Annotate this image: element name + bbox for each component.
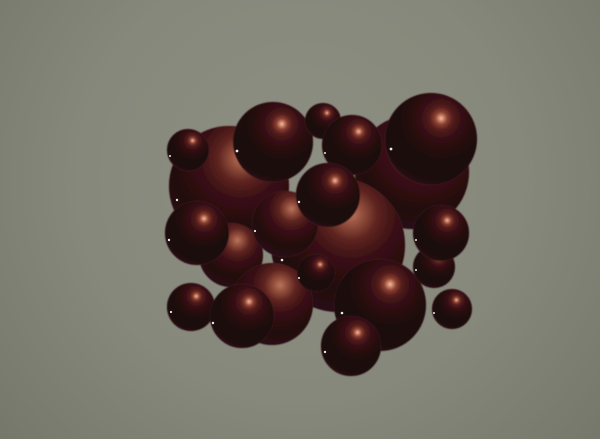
sphere: left [165,201,229,265]
sphere: top left small [167,129,209,171]
sphere: right [413,205,469,261]
sphere: centre [296,163,360,227]
sphere: bottom right large [334,259,426,351]
sphere: top tiny [305,103,341,139]
sphere: lower left small [167,283,215,331]
sphere: top left large [233,102,313,182]
sphere cluster [165,93,477,376]
sphere: right lower small [413,246,455,288]
sphere: top centre [322,115,382,175]
back sphere: bottom left [231,263,313,345]
back sphere: lower left [199,223,263,287]
specular glints [168,148,435,353]
back sphere: large left [169,126,289,246]
back sphere: large centre [271,178,405,312]
sphere: far right small [432,289,472,329]
sphere: top right largest [385,93,477,185]
back sphere: large right [355,115,469,229]
back sphere: middle [252,191,318,257]
sphere: inner small [297,254,335,292]
sphere: bottom [321,316,381,376]
sphere: lower left [210,284,274,348]
